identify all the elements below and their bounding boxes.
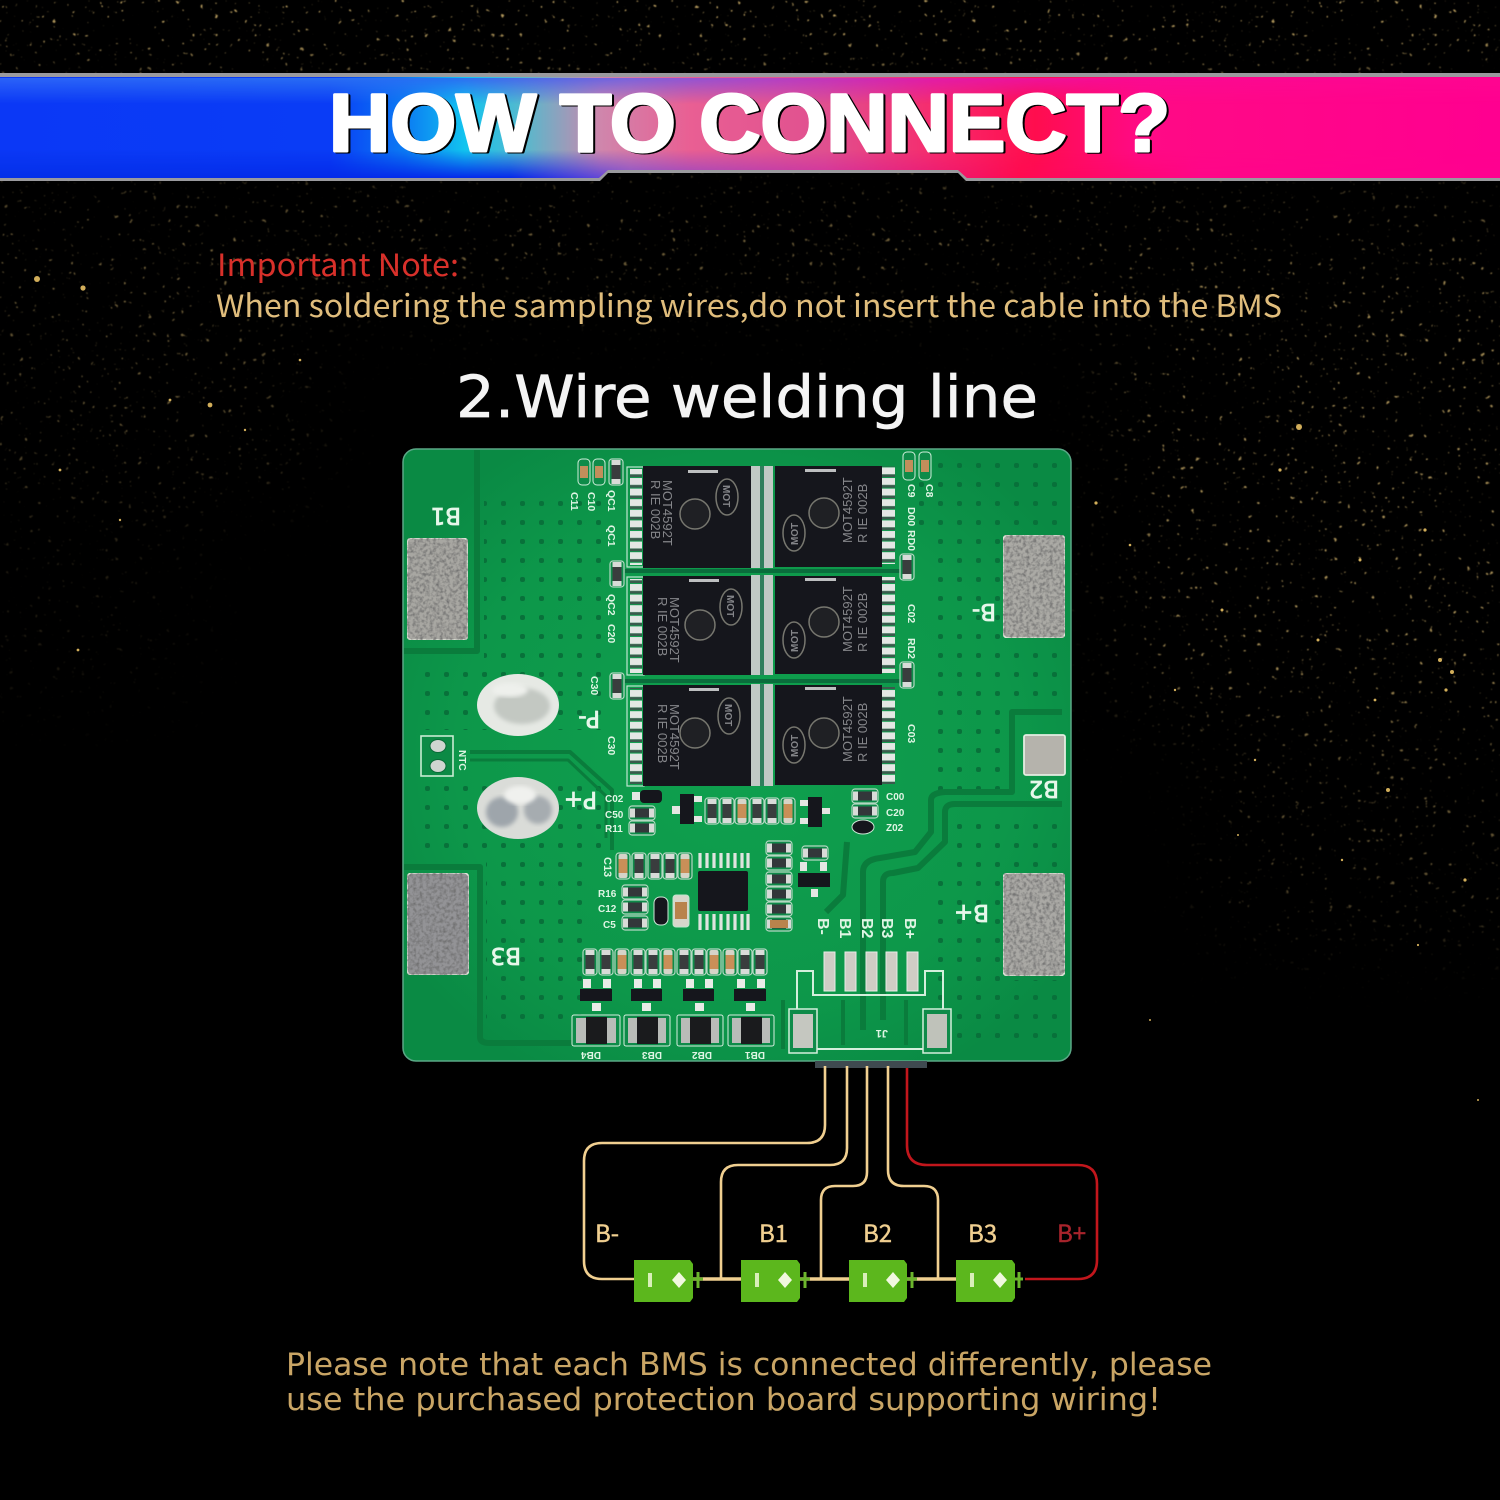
gold star field xyxy=(0,0,1500,978)
section heading: 2.Wire welding line xyxy=(456,363,1038,431)
series links xyxy=(693,1277,956,1281)
components under mosfets: C5 xyxy=(603,920,616,931)
battery 3 xyxy=(849,1260,917,1302)
mosfet chip row 2 left: MOT xyxy=(724,595,735,617)
footer note: Please note that each BMS is connected differently, please xyxy=(286,1347,1212,1383)
wire B3 xyxy=(888,1066,938,1279)
solder pad P+ xyxy=(477,777,559,839)
silkscreen pad labels: P+ xyxy=(564,786,597,812)
components under mosfets: R11 xyxy=(605,824,623,835)
small parts top right: RD0 xyxy=(905,530,917,551)
mosfet chip row 3 left: R IE 002B xyxy=(655,704,670,763)
balance connector footprint xyxy=(789,918,951,1053)
NTC connector xyxy=(421,736,467,776)
board substrate xyxy=(403,449,1071,1061)
balance connector footprint: B3 xyxy=(878,918,895,939)
components under mosfets: C20 xyxy=(886,808,905,819)
components under mosfets: R16 xyxy=(598,889,617,900)
small parts top left: QC2 xyxy=(605,594,617,616)
balance connector footprint: B- xyxy=(814,918,831,935)
label B2: B2 xyxy=(863,1214,892,1249)
control ic chip xyxy=(698,853,748,930)
small parts top left: C10 xyxy=(585,492,597,511)
wiring diagram xyxy=(584,1066,1097,1302)
small parts top left: QC1 xyxy=(605,525,617,547)
wire B- xyxy=(584,1066,825,1279)
solder pad B3 xyxy=(407,873,469,975)
mosfet chip row 2 left: MOT4592T xyxy=(667,597,682,663)
small parts top right: C9 xyxy=(905,484,917,498)
small parts top left: C20 xyxy=(605,624,617,643)
diode row: DB3 xyxy=(642,1049,662,1060)
battery 2 xyxy=(741,1260,810,1302)
label B1: B1 xyxy=(759,1214,788,1249)
solder pad B1 xyxy=(407,538,468,640)
important note heading: Important Note: xyxy=(217,240,459,285)
mosfet chip row 3 right: MOT xyxy=(790,735,801,757)
solder pad B+ xyxy=(1003,873,1065,976)
mosfet chip row 2 right: MOT xyxy=(790,630,801,652)
mosfet chip row 3 left: MOT4592T xyxy=(667,704,682,770)
silkscreen pad labels: P- xyxy=(578,705,600,731)
wire B2 xyxy=(821,1066,867,1279)
silkscreen pad labels: B- xyxy=(972,598,996,624)
small parts top left: C11 xyxy=(568,492,580,511)
scattered gold dots xyxy=(34,276,1479,1101)
balance connector footprint: J1 xyxy=(876,1027,888,1039)
resistor row xyxy=(583,949,767,975)
footer note xyxy=(286,1347,1212,1418)
mosfet chip row 1 right: R IE 002B xyxy=(855,484,870,543)
wire B+ xyxy=(907,1068,1097,1279)
small parts top right: RD2 xyxy=(905,638,917,659)
components under mosfets xyxy=(598,789,905,931)
diode row xyxy=(572,1015,774,1060)
NTC connector: NTC xyxy=(456,750,467,771)
control ic group xyxy=(616,841,792,931)
transistor row xyxy=(580,979,766,1011)
balance connector footprint: B+ xyxy=(901,918,918,939)
via dot grid xyxy=(415,460,1065,1050)
label B3: B3 xyxy=(968,1214,997,1249)
battery 1 xyxy=(634,1260,703,1302)
diode row: DB2 xyxy=(692,1049,712,1060)
mosfet chip row 2 right xyxy=(775,576,882,674)
small parts top left xyxy=(568,459,624,755)
balance connector footprint: B2 xyxy=(858,918,875,939)
banner xyxy=(0,73,1500,181)
mosfet chip row 3 right: MOT4592T xyxy=(840,696,855,762)
small parts top left: C30 xyxy=(588,676,600,695)
mosfet chip row 2 left xyxy=(643,576,751,675)
label B-: B- xyxy=(595,1214,619,1249)
silkscreen pad labels: B3 xyxy=(491,942,521,968)
balance connector footprint: B1 xyxy=(836,918,853,939)
title: HOW TO CONNECT? xyxy=(329,78,1170,169)
diode row: DB4 xyxy=(581,1049,601,1060)
mosfet chip row 3 left: MOT xyxy=(722,704,733,726)
banner gradient fill xyxy=(0,77,1500,178)
banner frame xyxy=(0,73,1500,181)
mosfet chip row 1 left xyxy=(643,466,751,568)
components under mosfets: C00 xyxy=(886,792,905,803)
silkscreen pad labels: B1 xyxy=(431,502,461,528)
components under mosfets: C02 xyxy=(605,794,624,805)
mosfet chip row 1 left: R IE 002B xyxy=(648,480,663,539)
wire B1 xyxy=(721,1066,847,1279)
small parts top right: C8 xyxy=(923,484,935,498)
mosfet chip row 2 left: R IE 002B xyxy=(655,597,670,656)
small parts top right xyxy=(900,452,935,743)
mosfet chip row 1 right xyxy=(775,466,882,567)
small parts top left: QC1 xyxy=(605,490,617,512)
mosfet chip row 3 left xyxy=(643,685,751,786)
components under mosfets: Z02 xyxy=(886,823,904,834)
mosfet chip row 1 right: MOT4592T xyxy=(840,477,855,543)
mosfet chip row 2 right: MOT4592T xyxy=(840,586,855,652)
small parts top right: D00 xyxy=(905,507,917,526)
silkscreen pad labels xyxy=(431,502,1059,968)
mosfet chip row 1 right: MOT xyxy=(790,523,801,545)
important note body: When soldering the sampling wires,do not insert the cable into the BMS xyxy=(216,281,1282,326)
pcb board xyxy=(403,449,1071,1061)
battery 4 xyxy=(956,1260,1023,1302)
silkscreen pad labels: B2 xyxy=(1029,775,1059,801)
solder pad P- xyxy=(477,674,559,736)
mosfet chip row 3 right: R IE 002B xyxy=(855,703,870,762)
small parts top left: C30 xyxy=(605,736,617,755)
silkscreen pad labels: B+ xyxy=(954,899,989,925)
mosfet chip row 1 left: MOT4592T xyxy=(660,480,675,546)
components under mosfets: C50 xyxy=(605,810,624,821)
small parts top right: C02 xyxy=(905,604,917,623)
components under mosfets: C13 xyxy=(601,857,613,877)
connector plug under board xyxy=(815,1061,927,1068)
mosfet pin strips xyxy=(627,466,895,786)
mosfet chip row 3 right xyxy=(775,685,882,785)
solder pad B2 xyxy=(1024,735,1065,775)
mosfet chip row 2 right: R IE 002B xyxy=(855,593,870,652)
center silver strips xyxy=(751,466,773,786)
small parts top right: C03 xyxy=(905,724,917,743)
solder pad B- xyxy=(1003,535,1065,638)
mosfet chip row 1 left: MOT xyxy=(720,485,731,507)
copper traces xyxy=(404,450,1062,1049)
footer note: use the purchased protection board supporting wiring! xyxy=(286,1382,1161,1418)
components under mosfets: C12 xyxy=(598,904,617,915)
diode row: DB1 xyxy=(745,1049,765,1060)
label B+: B+ xyxy=(1057,1214,1086,1249)
